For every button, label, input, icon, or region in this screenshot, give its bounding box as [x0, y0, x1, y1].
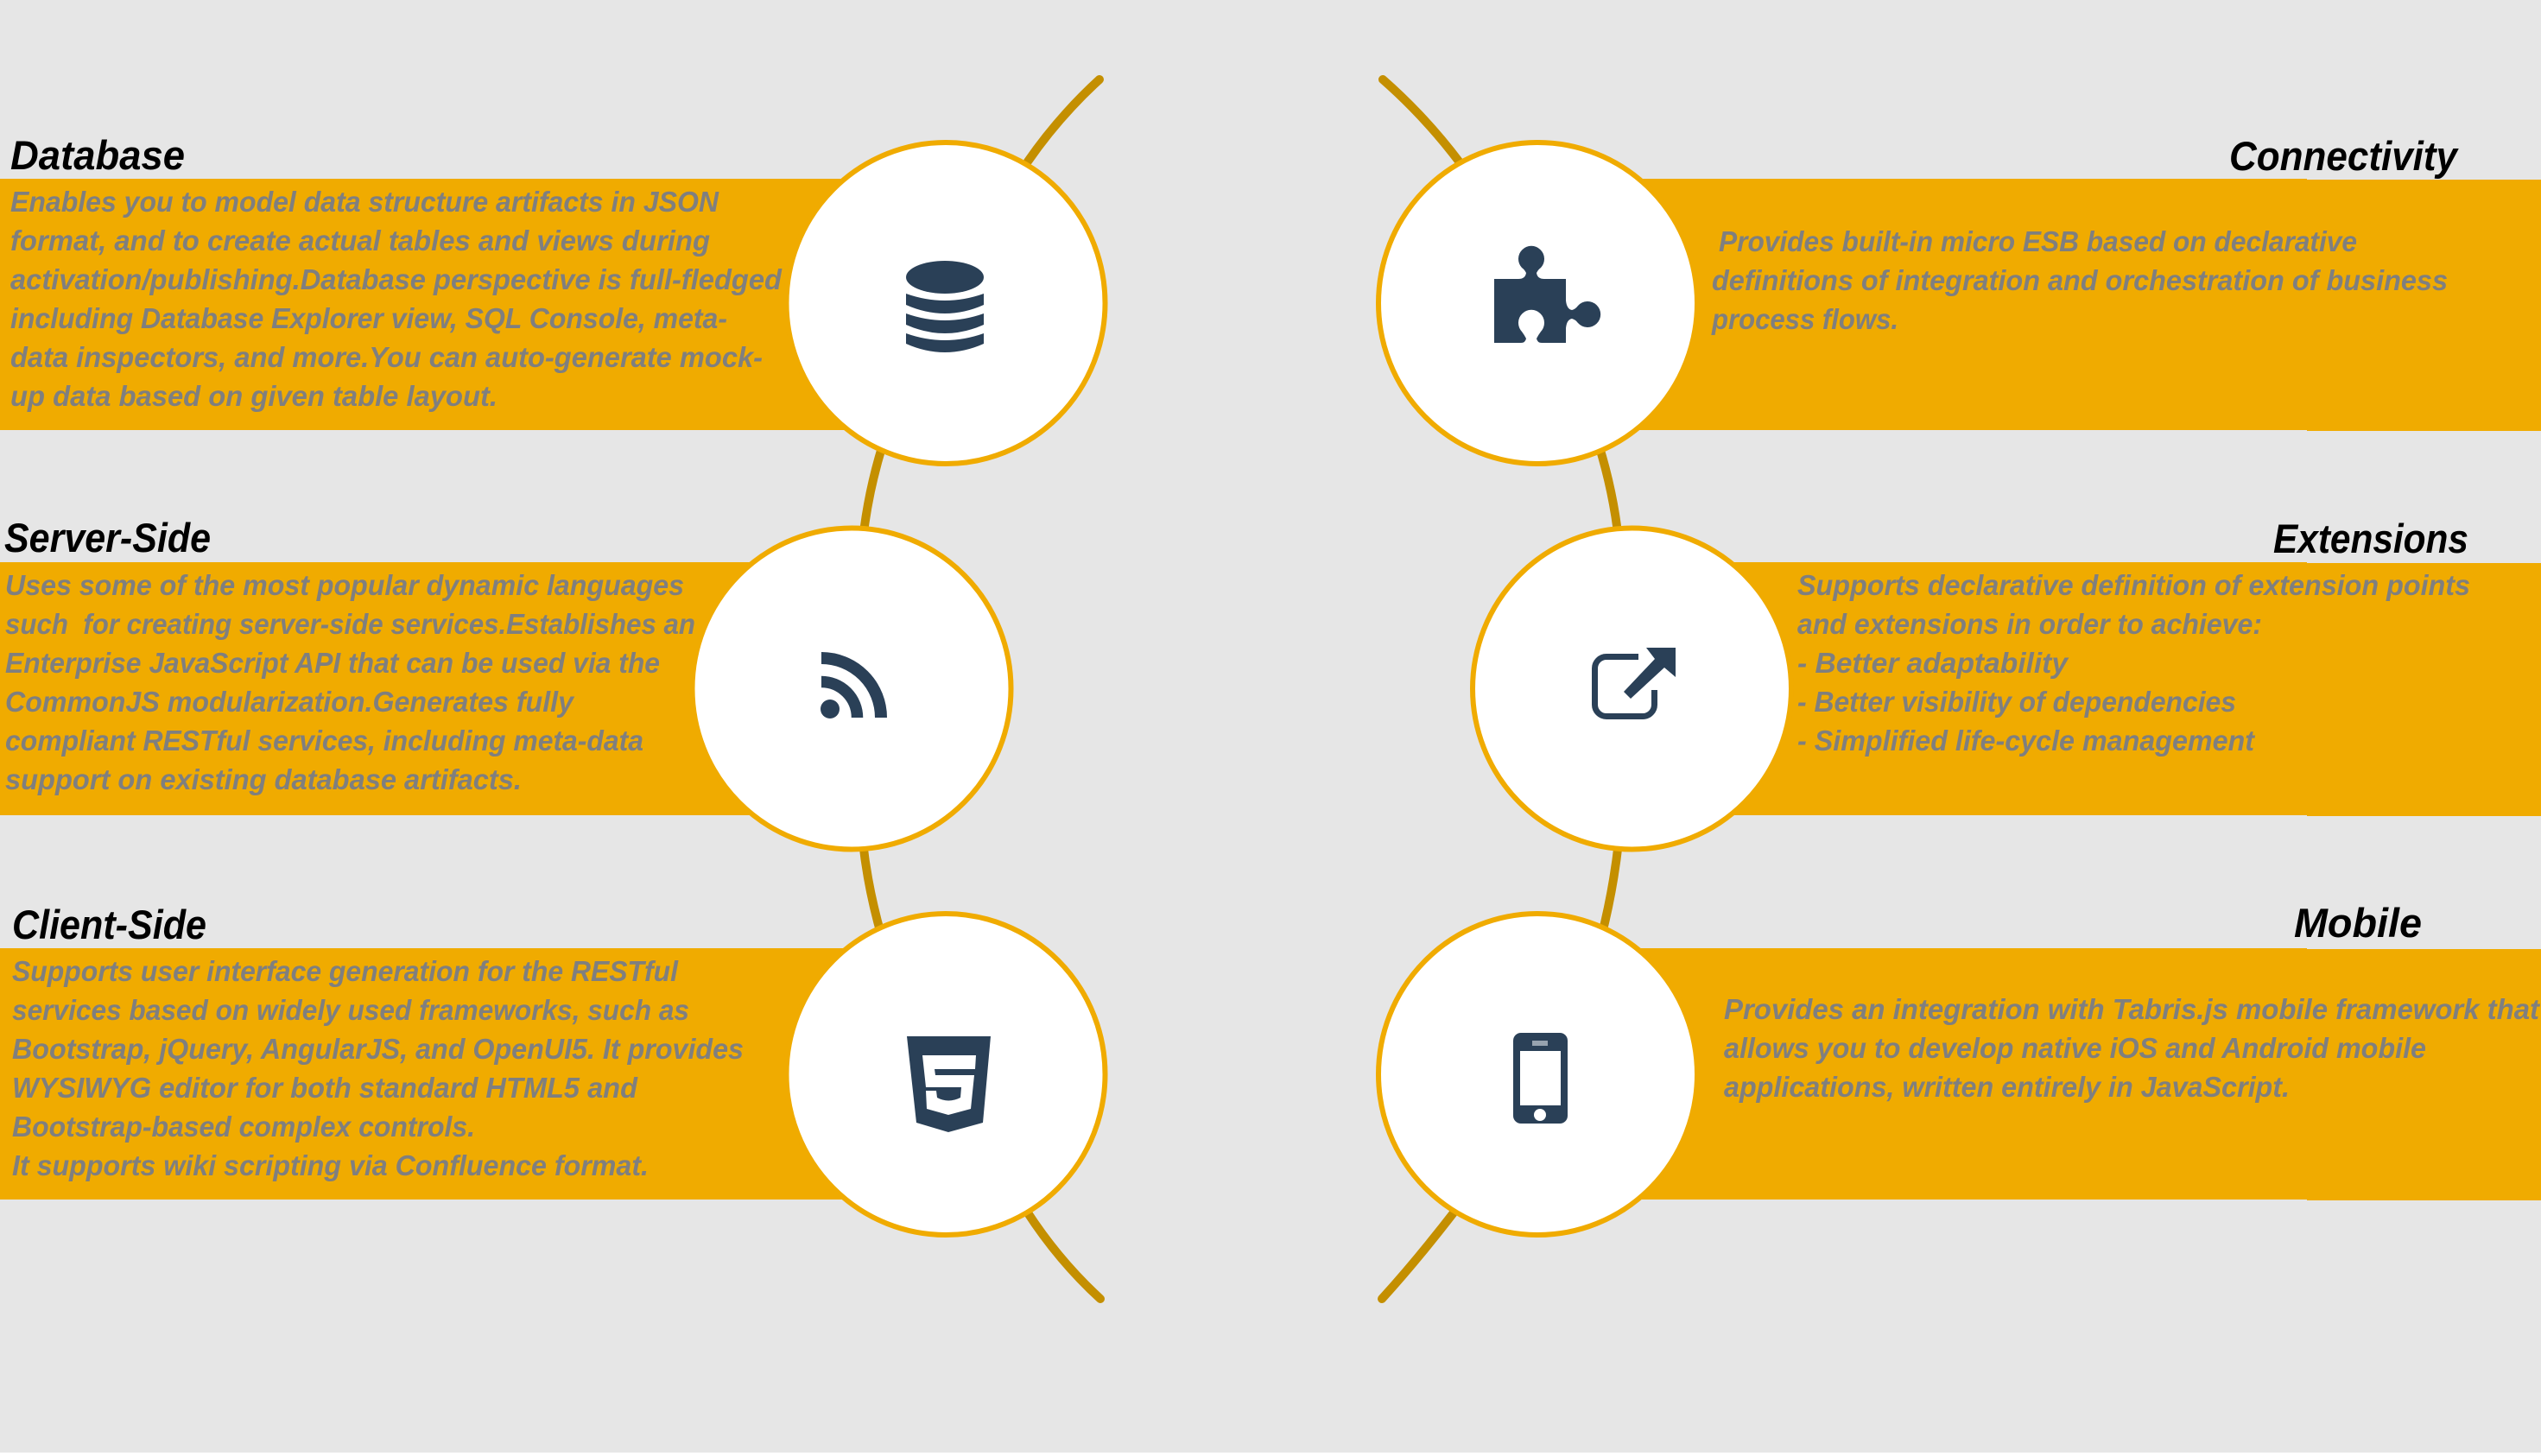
extensions description: [1797, 570, 2470, 757]
client-side description: Bootstrap-based complex controls.: [12, 1111, 475, 1143]
server-side description: compliant RESTful services, including meta-data: [5, 725, 643, 757]
database description: Enables you to model data structure artifacts in JSON: [10, 187, 719, 218]
client-side circle: [786, 914, 1106, 1235]
server-side description: CommonJS modularization.Generates fully: [5, 687, 575, 719]
panel: server-side: [0, 515, 1011, 850]
client-side description: services based on widely used frameworks, such as: [12, 995, 689, 1027]
icon: rss feed: [821, 658, 881, 719]
connectivity band: [1537, 179, 2541, 431]
connectivity heading: Connectivity: [2229, 133, 2460, 179]
connectivity circle: [1378, 142, 1697, 464]
connectivity description: [1711, 226, 2448, 336]
server-side description: Enterprise JavaScript API that can be used via the: [5, 648, 660, 680]
database description: up data based on given table layout.: [10, 381, 497, 413]
extensions description: - Better visibility of dependencies: [1797, 687, 2236, 719]
server-side heading: Server-Side: [4, 515, 211, 560]
extensions description: - Simplified life-cycle management: [1797, 725, 2256, 757]
server-side description: [5, 570, 695, 796]
server-side circle: [693, 529, 1011, 850]
icon: puzzle piece: [1494, 246, 1600, 343]
mobile circle: [1378, 914, 1697, 1235]
database heading: Database: [10, 132, 185, 178]
database description: format, and to create actual tables and views during: [10, 225, 710, 257]
server-side description: Uses some of the most popular dynamic languages: [5, 570, 684, 602]
server-side band: [0, 562, 852, 815]
panel: connectivity: [1378, 133, 2541, 464]
icon: database stack: [906, 261, 984, 352]
client-side description: WYSIWYG editor for both standard HTML5 and: [12, 1073, 638, 1105]
icon: external link: [1594, 648, 1676, 717]
database band: [0, 179, 946, 430]
extensions circle: [1473, 529, 1791, 850]
server-side description: support on existing database artifacts.: [5, 764, 522, 796]
mobile description: [1724, 994, 2541, 1104]
client-side heading: Client-Side: [12, 902, 206, 947]
client-side description: Supports user interface generation for the RESTful: [12, 956, 679, 988]
extensions heading: Extensions: [2273, 516, 2468, 561]
database description: including Database Explorer view, SQL Console, meta-: [10, 303, 727, 335]
client-side description: Bootstrap, jQuery, AngularJS, and OpenUI5. It provides: [12, 1034, 744, 1066]
panel: mobile: [1378, 900, 2541, 1235]
mobile band: [1537, 948, 2541, 1200]
extensions description: and extensions in order to achieve:: [1797, 609, 2262, 641]
connectivity description: process flows.: [1711, 304, 1898, 336]
extensions description: Supports declarative definition of extension points: [1797, 570, 2470, 602]
mobile description: applications, written entirely in JavaScript.: [1724, 1072, 2290, 1104]
extensions band: [1631, 562, 2541, 816]
connector arcs: left chain: [863, 79, 1100, 1299]
database description: activation/publishing.Database perspective is full-fledged: [10, 264, 783, 296]
panel: database: [0, 132, 1106, 464]
mobile description: Provides an integration with Tabris.js mobile framework that: [1724, 994, 2541, 1026]
server-side description: such for creating server-side services.Establishes an: [5, 609, 695, 641]
mobile description: allows you to develop native iOS and Android mobile: [1724, 1033, 2426, 1065]
icon: html5 shield: [907, 1036, 991, 1132]
panel: extensions: [1473, 516, 2541, 850]
database description: [10, 187, 783, 413]
database description: data inspectors, and more.You can auto-generate mock-: [10, 342, 763, 374]
client-side description: [12, 956, 744, 1182]
icon: smartphone: [1513, 1033, 1568, 1124]
connectivity description: definitions of integration and orchestration of business: [1712, 265, 2448, 297]
extensions description: - Better adaptability: [1797, 648, 2069, 680]
connectivity description: Provides built-in micro ESB based on declarative: [1719, 226, 2357, 258]
mobile heading: Mobile: [2294, 900, 2422, 946]
client-side description: It supports wiki scripting via Confluence format.: [12, 1150, 649, 1182]
database circle: [786, 142, 1106, 464]
client-side band: [0, 948, 946, 1200]
panel: client-side: [0, 902, 1106, 1235]
connector arcs: right chain: [1382, 79, 1619, 1299]
